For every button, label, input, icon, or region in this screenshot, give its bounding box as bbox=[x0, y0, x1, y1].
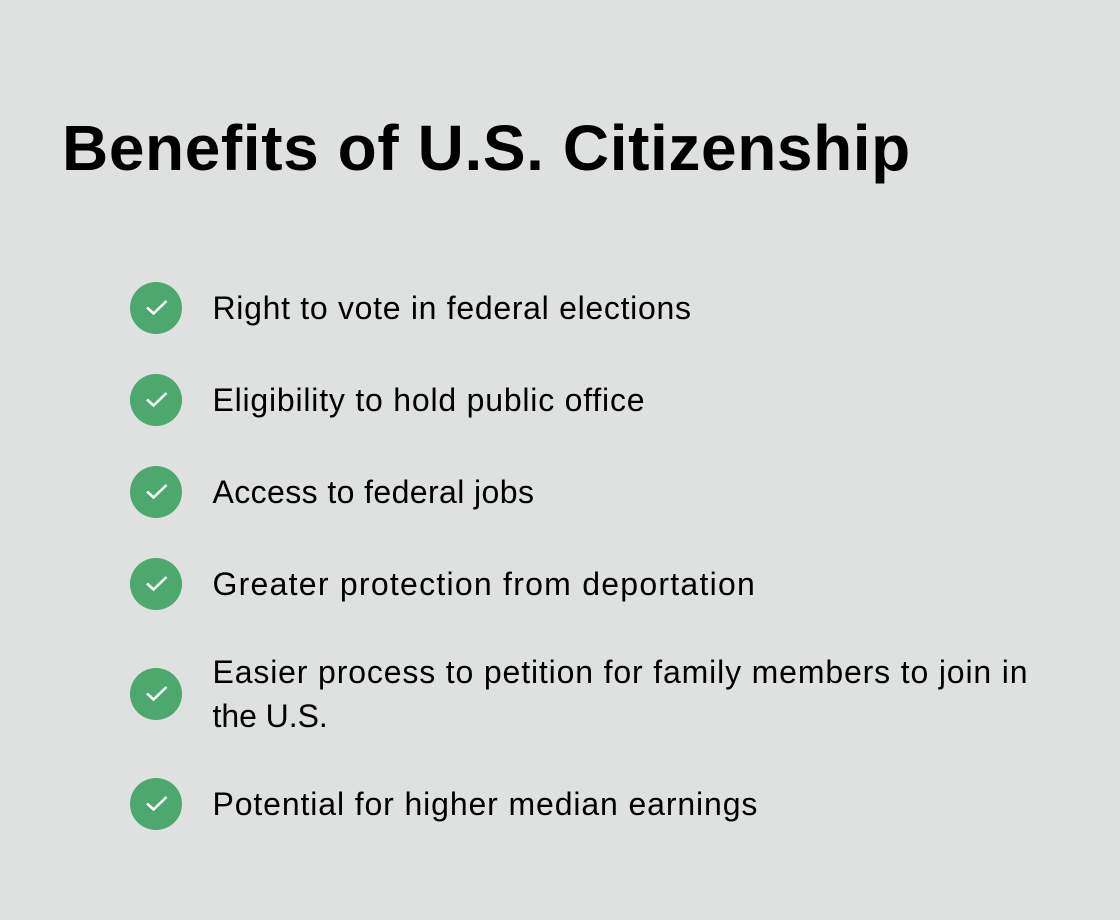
list item: vote bbox=[130, 282, 692, 334]
list item: family bbox=[130, 654, 1028, 734]
text: Easier process to petition for family members to join in bbox=[212, 654, 1028, 690]
icon: check bbox=[130, 466, 182, 518]
text: Eligibility to hold public office bbox=[212, 382, 645, 418]
text: Right to vote in federal elections bbox=[212, 290, 692, 326]
icon: check bbox=[130, 778, 182, 830]
icon: check bbox=[130, 558, 182, 610]
icon: check bbox=[130, 374, 182, 426]
icon: check bbox=[130, 282, 182, 334]
text: Potential for higher median earnings bbox=[212, 786, 758, 822]
text: Greater protection from deportation bbox=[212, 566, 756, 602]
text: the U.S. bbox=[212, 698, 328, 734]
list item: office bbox=[130, 374, 645, 426]
icon: check bbox=[130, 668, 182, 720]
list item: earnings bbox=[130, 778, 758, 830]
benefits list bbox=[130, 282, 1028, 830]
text bbox=[212, 654, 1028, 734]
text: Access to federal jobs bbox=[212, 474, 534, 510]
title: Benefits of U.S. Citizenship bbox=[62, 112, 911, 184]
list item: deportation bbox=[130, 558, 756, 610]
list item: jobs bbox=[130, 466, 534, 518]
